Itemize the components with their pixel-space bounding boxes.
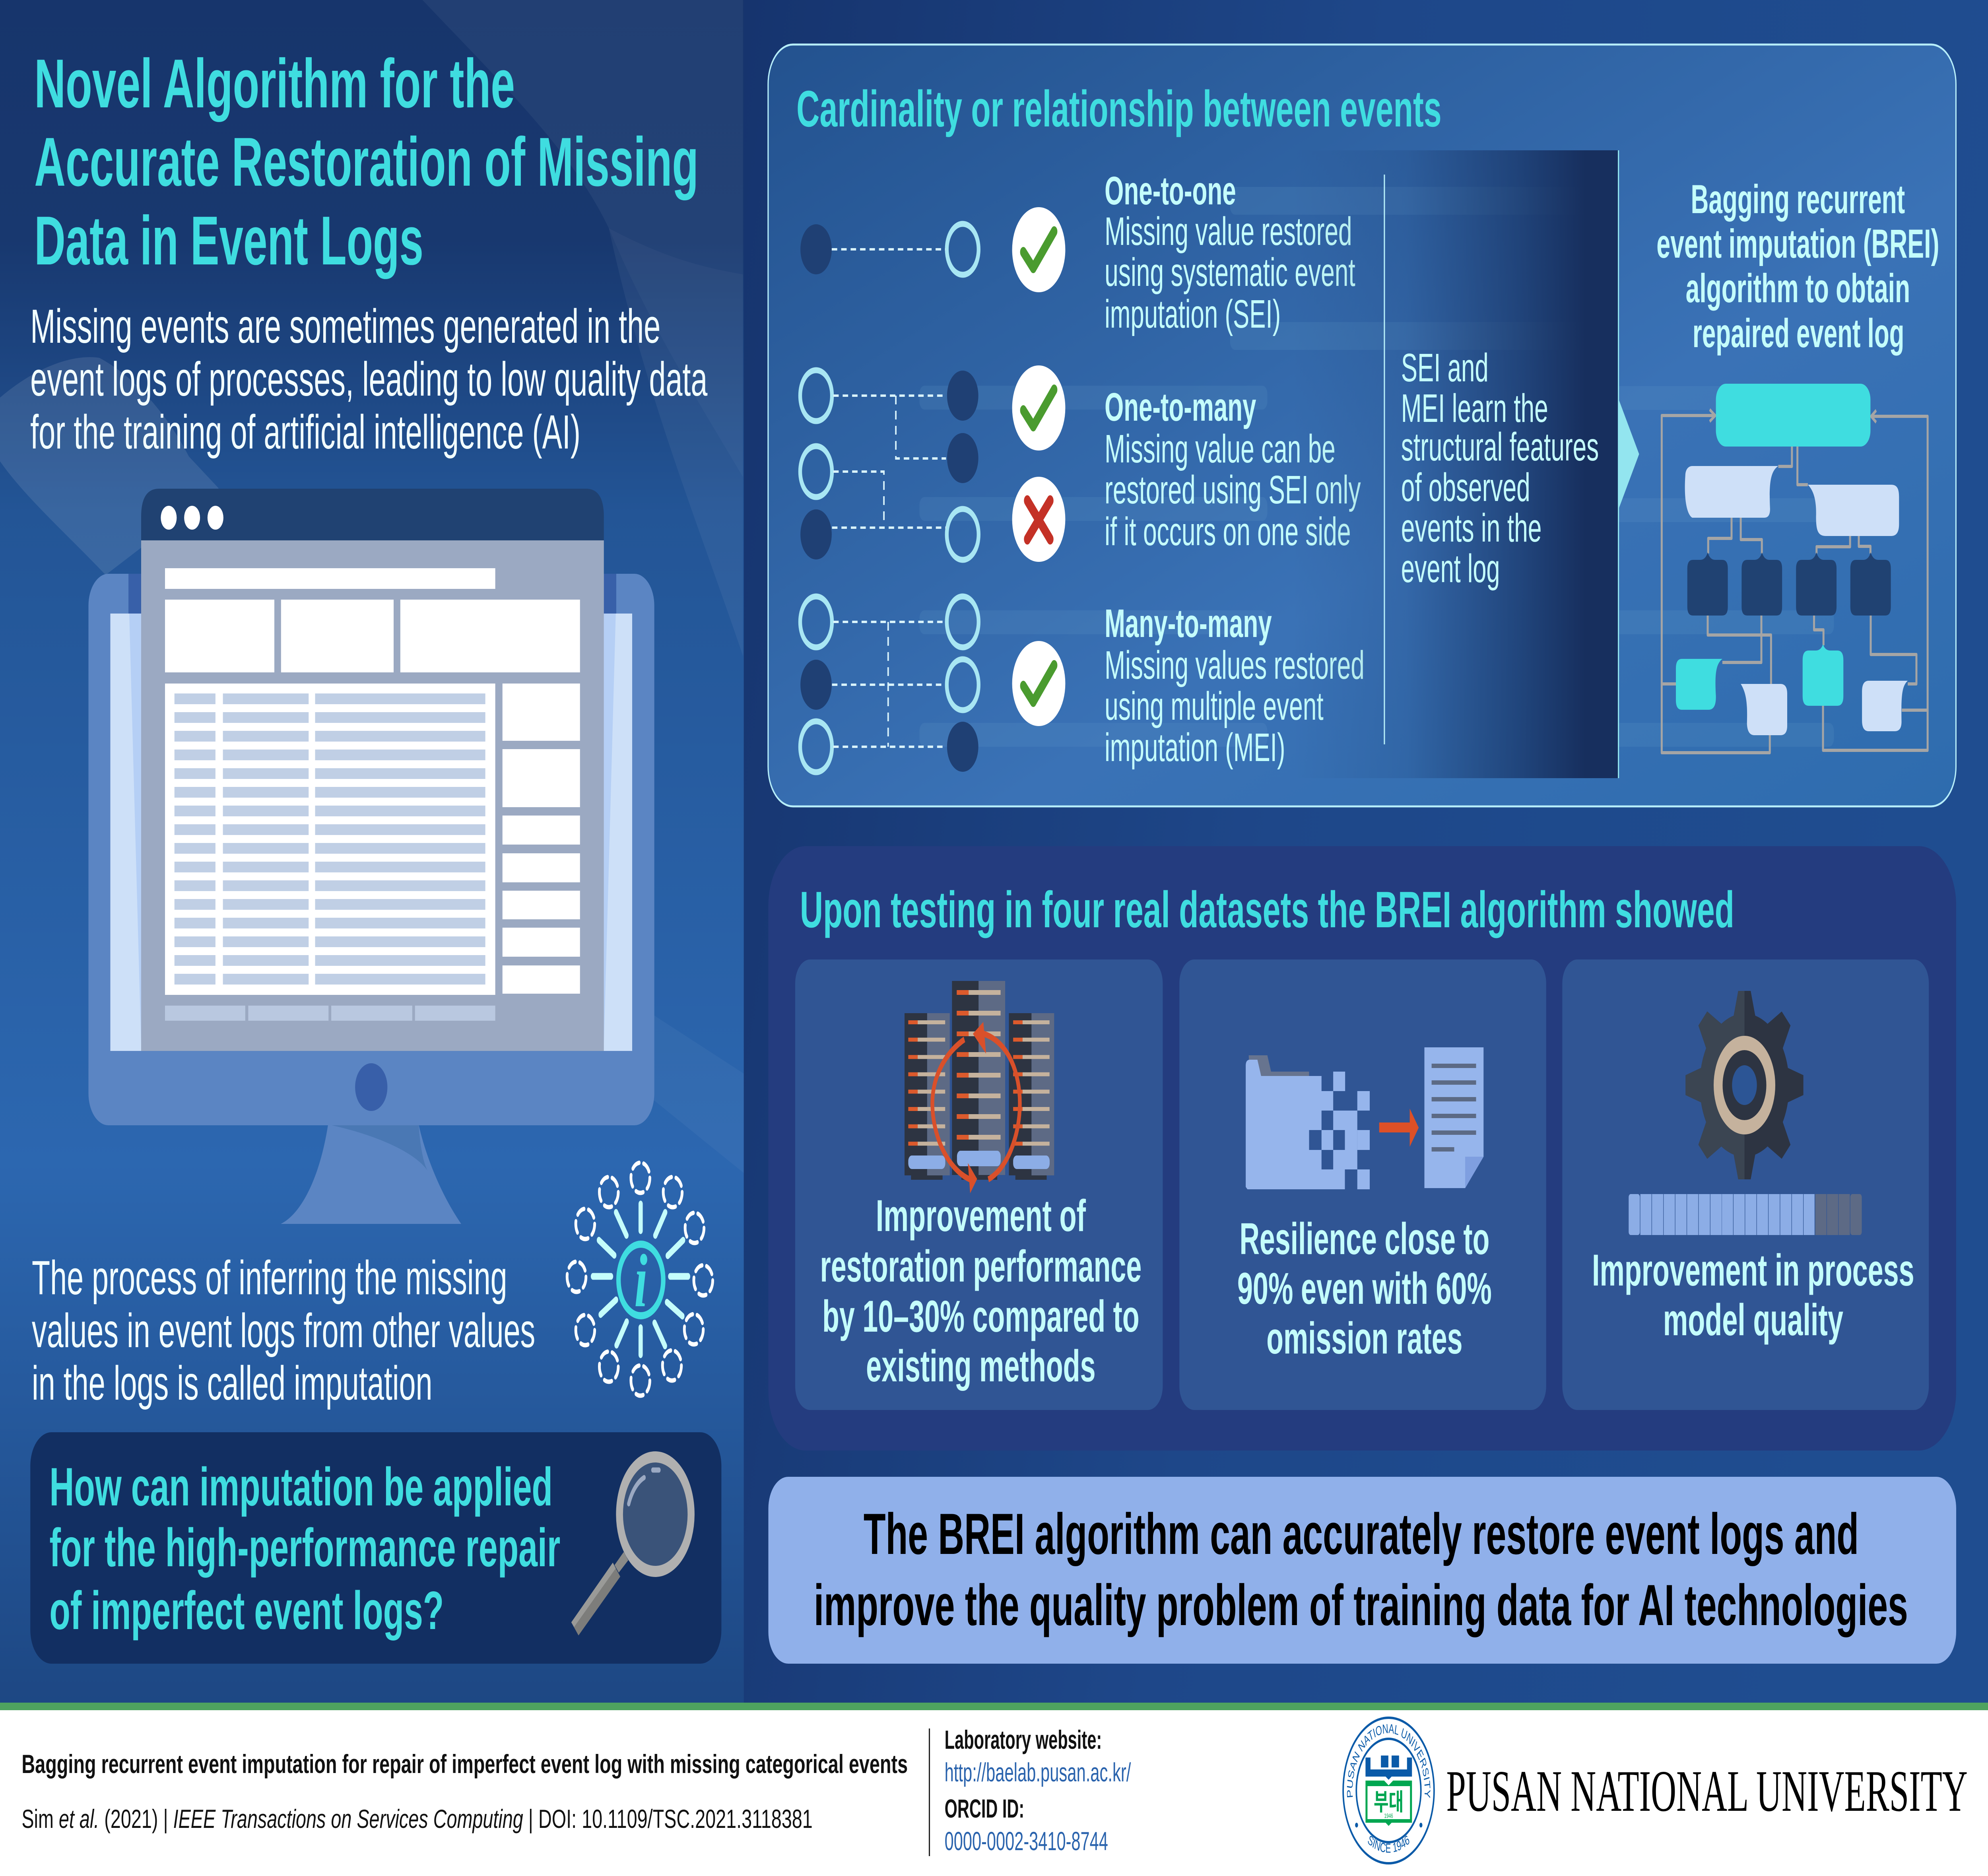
icon: magnifying glass (571, 1457, 691, 1635)
card: restoration performance: existing methods (866, 1341, 1096, 1391)
logo: university seal: 1946 (1384, 1812, 1393, 1820)
citation: Sim et al. (2021) | IEEE Transactions on Services Computing | DOI: 10.1109/TSC.2021.3118381 (21, 1804, 813, 1833)
laboratory links: 0000-0002-3410-8744 (945, 1826, 1108, 1856)
dark column: SEI and MEI note: MEI learn the (1401, 386, 1548, 431)
question callout (30, 1432, 721, 1664)
footer (0, 1703, 1988, 1876)
dark column: SEI and MEI note: of observed (1401, 465, 1530, 510)
dark column: SEI and MEI note: SEI and (1401, 346, 1489, 390)
dark column: SEI and MEI note: event log (1401, 546, 1500, 591)
question callout: of imperfect event logs? (49, 1581, 444, 1641)
title: Data in Event Logs (34, 202, 423, 279)
icon: monitor with event log window (88, 489, 654, 1224)
text: one-to-many: One-to-many (1105, 385, 1256, 429)
text: many-to-many: imputation (MEI) (1105, 725, 1285, 770)
logo: university seal: PUSAN NATIONAL UNIVERSITY (1345, 1721, 1432, 1798)
icon: servers with cycle arrows (905, 981, 1054, 1193)
diagram: many-to-many (800, 596, 1065, 772)
text: one-to-many: Missing value can be (1105, 427, 1336, 471)
laboratory links (945, 1725, 1131, 1856)
logo: university name: PUSAN NATIONAL UNIVERSITY (1446, 1758, 1968, 1824)
icon: information hub (567, 1163, 712, 1396)
title (34, 45, 699, 279)
text: one-to-one: using systematic event (1105, 250, 1355, 295)
text: one-to-one: imputation (SEI) (1105, 292, 1281, 336)
heading: BREI algorithm (1656, 177, 1939, 356)
logo: university seal (1343, 1718, 1434, 1863)
dark column: SEI and MEI note: structural features (1401, 425, 1599, 469)
title: Novel Algorithm for the (34, 45, 515, 122)
logo: university seal: SINCE 1946 (1366, 1832, 1411, 1856)
title: Accurate Restoration of Missing (34, 123, 699, 200)
card: resilience: 90% even with 60% (1237, 1263, 1492, 1313)
question callout: for the high-performance repair (49, 1518, 560, 1578)
dark column: SEI and MEI note: events in the (1401, 506, 1542, 550)
conclusion banner: improve the quality problem of training data for AI technologies (814, 1573, 1908, 1637)
text: many-to-many: Missing values restored (1105, 643, 1365, 687)
card: restoration performance: by 10–30% compared to (822, 1291, 1140, 1341)
citation: Bagging recurrent event imputation for repair of imperfect event log with missing categorical events (21, 1749, 908, 1779)
text: many-to-many (1105, 601, 1365, 770)
icon: information hub: i (634, 1239, 647, 1323)
text: one-to-one (1105, 169, 1355, 336)
card: restoration performance (795, 959, 1163, 1410)
imputation text (32, 1251, 535, 1410)
text: many-to-many: Many-to-many (1105, 601, 1272, 646)
text: one-to-one: Missing value restored (1105, 209, 1352, 254)
intro text: for the training of artificial intelligence (AI) (30, 406, 580, 459)
text: one-to-many: restored using SEI only (1105, 468, 1361, 512)
dark column: SEI and MEI note (1292, 150, 1619, 778)
logo: university seal: 부대 (1374, 1789, 1404, 1816)
text: one-to-many (1105, 385, 1361, 554)
card: process model quality: model quality (1663, 1295, 1843, 1345)
text: one-to-one: One-to-one (1105, 169, 1236, 213)
heading: cardinality: Cardinality or relationship between events (796, 80, 1442, 138)
laboratory links: ORCID ID: (945, 1794, 1024, 1823)
text: one-to-many: if it occurs on one side (1105, 509, 1351, 554)
flow diagram: repaired event log (1662, 384, 1928, 753)
question callout: How can imputation be applied (49, 1457, 553, 1517)
imputation text: in the logs is called imputation (32, 1357, 433, 1410)
text: many-to-many: using multiple event (1105, 684, 1324, 728)
card: restoration performance: restoration performance (820, 1241, 1142, 1291)
imputation text: values in event logs from other values (32, 1304, 535, 1357)
panel: cardinality between events (768, 45, 1956, 806)
intro text: Missing events are sometimes generated in the (30, 300, 660, 353)
conclusion banner (768, 1477, 1956, 1664)
card: resilience (1179, 959, 1546, 1410)
heading: BREI algorithm: Bagging recurrent (1691, 177, 1905, 222)
intro text: event logs of processes, leading to low quality data (30, 353, 708, 406)
icon: folder, arrow and document (1246, 1047, 1483, 1189)
heading: test results: Upon testing in four real datasets the BREI algorithm showed (800, 881, 1734, 938)
heading: BREI algorithm: algorithm to obtain (1686, 266, 1910, 311)
card: resilience: omission rates (1266, 1313, 1462, 1363)
card: restoration performance: Improvement of (876, 1190, 1086, 1241)
laboratory links: http://baelab.pusan.ac.kr/ (945, 1758, 1131, 1787)
arrow: to BREI (1619, 399, 1639, 509)
diagram: one-to-many (800, 365, 1065, 562)
diagram: one-to-one (800, 207, 1065, 292)
imputation text: The process of inferring the missing (32, 1251, 507, 1305)
heading: BREI algorithm: event imputation (BREI) (1656, 221, 1939, 267)
intro text (30, 300, 708, 459)
citation (21, 1749, 908, 1833)
heading: BREI algorithm: repaired event log (1693, 311, 1904, 356)
card: resilience: Resilience close to (1240, 1214, 1489, 1264)
icon: gear and progress bar (1629, 991, 1862, 1235)
conclusion banner: The BREI algorithm can accurately restore event logs and (864, 1501, 1859, 1566)
card: process model quality: Improvement in process (1592, 1245, 1914, 1295)
laboratory links: Laboratory website: (945, 1725, 1102, 1754)
panel: test results (768, 846, 1956, 1451)
card: process model quality (1562, 959, 1929, 1410)
